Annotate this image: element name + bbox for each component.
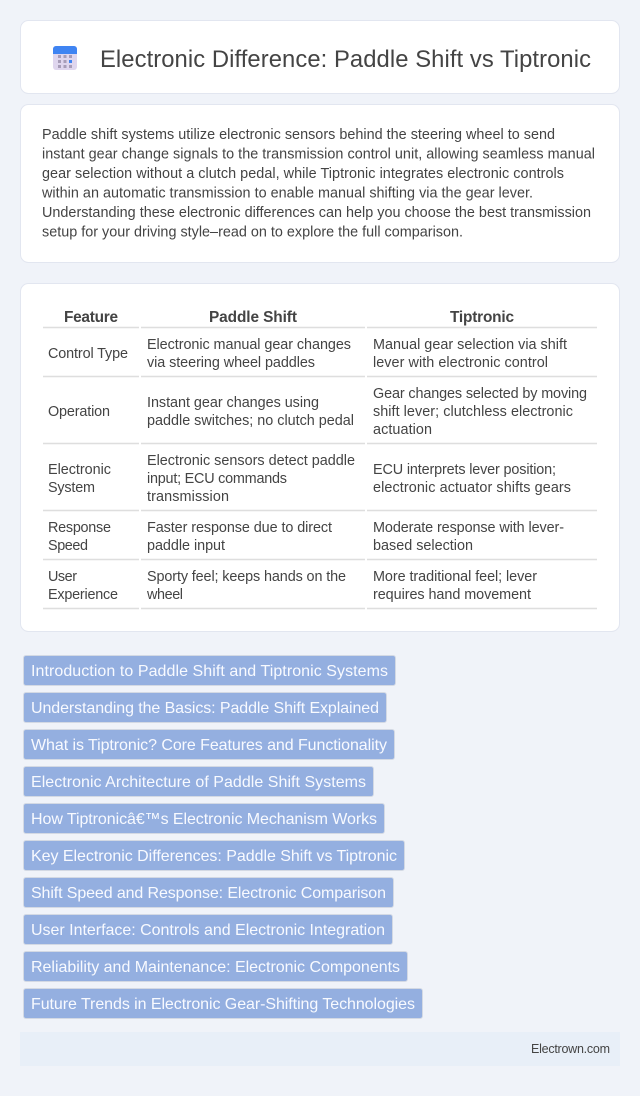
row: user experience: Sporty feel; keeps hands on the <box>147 569 346 585</box>
row: operation: Gear changes selected by moving <box>373 386 587 402</box>
link 8: User Interface: Controls and Electronic Integration <box>31 922 385 939</box>
row: response speed: paddle input <box>147 538 225 554</box>
intro paragraph: Understanding these electronic differences can help you choose the best transmission <box>42 205 591 221</box>
row: electronic system: System <box>48 480 95 496</box>
link 9 <box>24 952 408 982</box>
row: user experience: requires hand movement <box>373 587 531 603</box>
row: electronic system: ECU interprets lever position; <box>373 462 556 478</box>
panel: introduction <box>20 104 620 262</box>
link 2: Understanding the Basics: Paddle Shift Explained <box>31 700 379 717</box>
row: response speed: Speed <box>48 538 88 554</box>
icon: calendar grid <box>53 46 77 70</box>
row: user experience: More traditional feel; lever <box>373 569 537 585</box>
row: electronic system <box>48 453 571 505</box>
table header <box>64 309 514 326</box>
link 10 <box>24 988 422 1018</box>
link 3: What is Tiptronic? Core Features and Functionality <box>31 737 387 754</box>
intro paragraph: gear selection without a clutch pedal, while Tiptronic integrates electronic controls <box>42 166 564 182</box>
table header: Tiptronic <box>450 309 514 326</box>
row: electronic system: Electronic <box>48 462 111 478</box>
link 2 <box>24 692 386 722</box>
link 5: How Tiptronicâ€™s Electronic Mechanism Works <box>31 811 377 828</box>
row: electronic system: Electronic sensors detect paddle <box>147 453 355 469</box>
link 1 <box>24 656 396 686</box>
row: control type: Manual gear selection via shift <box>373 337 567 353</box>
row: response speed: Moderate response with lever- <box>373 520 564 536</box>
footer <box>20 1032 620 1066</box>
link 9: Reliability and Maintenance: Electronic Components <box>31 959 400 976</box>
row: operation: paddle switches; no clutch pedal <box>147 413 354 429</box>
row: response speed: based selection <box>373 538 473 554</box>
row: electronic system: transmission <box>147 489 229 505</box>
row: response speed: Faster response due to direct <box>147 520 332 536</box>
row: control type: Control Type <box>48 346 128 362</box>
intro paragraph <box>41 127 595 240</box>
row: response speed <box>48 520 564 554</box>
link 4: Electronic Architecture of Paddle Shift Systems <box>31 774 366 791</box>
link 4 <box>24 766 374 796</box>
link 5 <box>24 804 384 834</box>
row: electronic system: input; ECU commands <box>147 471 287 487</box>
row: user experience: Experience <box>48 587 118 603</box>
row: control type <box>48 337 567 371</box>
link 6: Key Electronic Differences: Paddle Shift vs Tiptronic <box>31 848 397 865</box>
row: control type: Electronic manual gear changes <box>147 337 351 353</box>
link 8 <box>24 914 392 944</box>
intro paragraph: Paddle shift systems utilize electronic sensors behind the steering wheel to send <box>42 127 555 143</box>
intro paragraph: within an automatic transmission to enable manual shifting via the gear lever. <box>41 186 533 202</box>
section links <box>24 656 422 1018</box>
link 7 <box>24 878 394 908</box>
table header: Feature <box>64 309 118 326</box>
row: operation <box>48 386 587 438</box>
row: operation: shift lever; clutchless electronic <box>373 404 573 420</box>
link 7: Shift Speed and Response: Electronic Comparison <box>31 885 386 902</box>
row: operation: Instant gear changes using <box>147 395 319 411</box>
link 3 <box>24 730 394 760</box>
row: user experience: User <box>48 569 77 585</box>
panel: title card <box>20 20 620 94</box>
link 6 <box>24 840 404 870</box>
row: response speed: Response <box>48 520 111 536</box>
row: user experience <box>48 569 537 603</box>
footer: Electrown.com <box>531 1042 610 1056</box>
row: operation: Operation <box>48 404 110 420</box>
link 1: Introduction to Paddle Shift and Tiptronic Systems <box>31 663 388 680</box>
panel: comparison table <box>20 284 620 632</box>
row: control type: lever with electronic control <box>373 355 548 371</box>
table header: Paddle Shift <box>209 309 297 326</box>
link 10: Future Trends in Electronic Gear-Shifting Technologies <box>31 996 415 1013</box>
row: operation: actuation <box>373 422 432 438</box>
row: control type: via steering wheel paddles <box>147 355 315 371</box>
intro paragraph: setup for your driving style–read on to explore the full comparison. <box>42 224 463 240</box>
row: electronic system: electronic actuator shifts gears <box>373 480 571 496</box>
intro paragraph: instant gear change signals to the transmission control unit, allowing seamless manual <box>42 146 595 162</box>
row: user experience: wheel <box>146 587 183 603</box>
title: Electronic Difference: Paddle Shift vs Tiptronic <box>100 46 591 73</box>
